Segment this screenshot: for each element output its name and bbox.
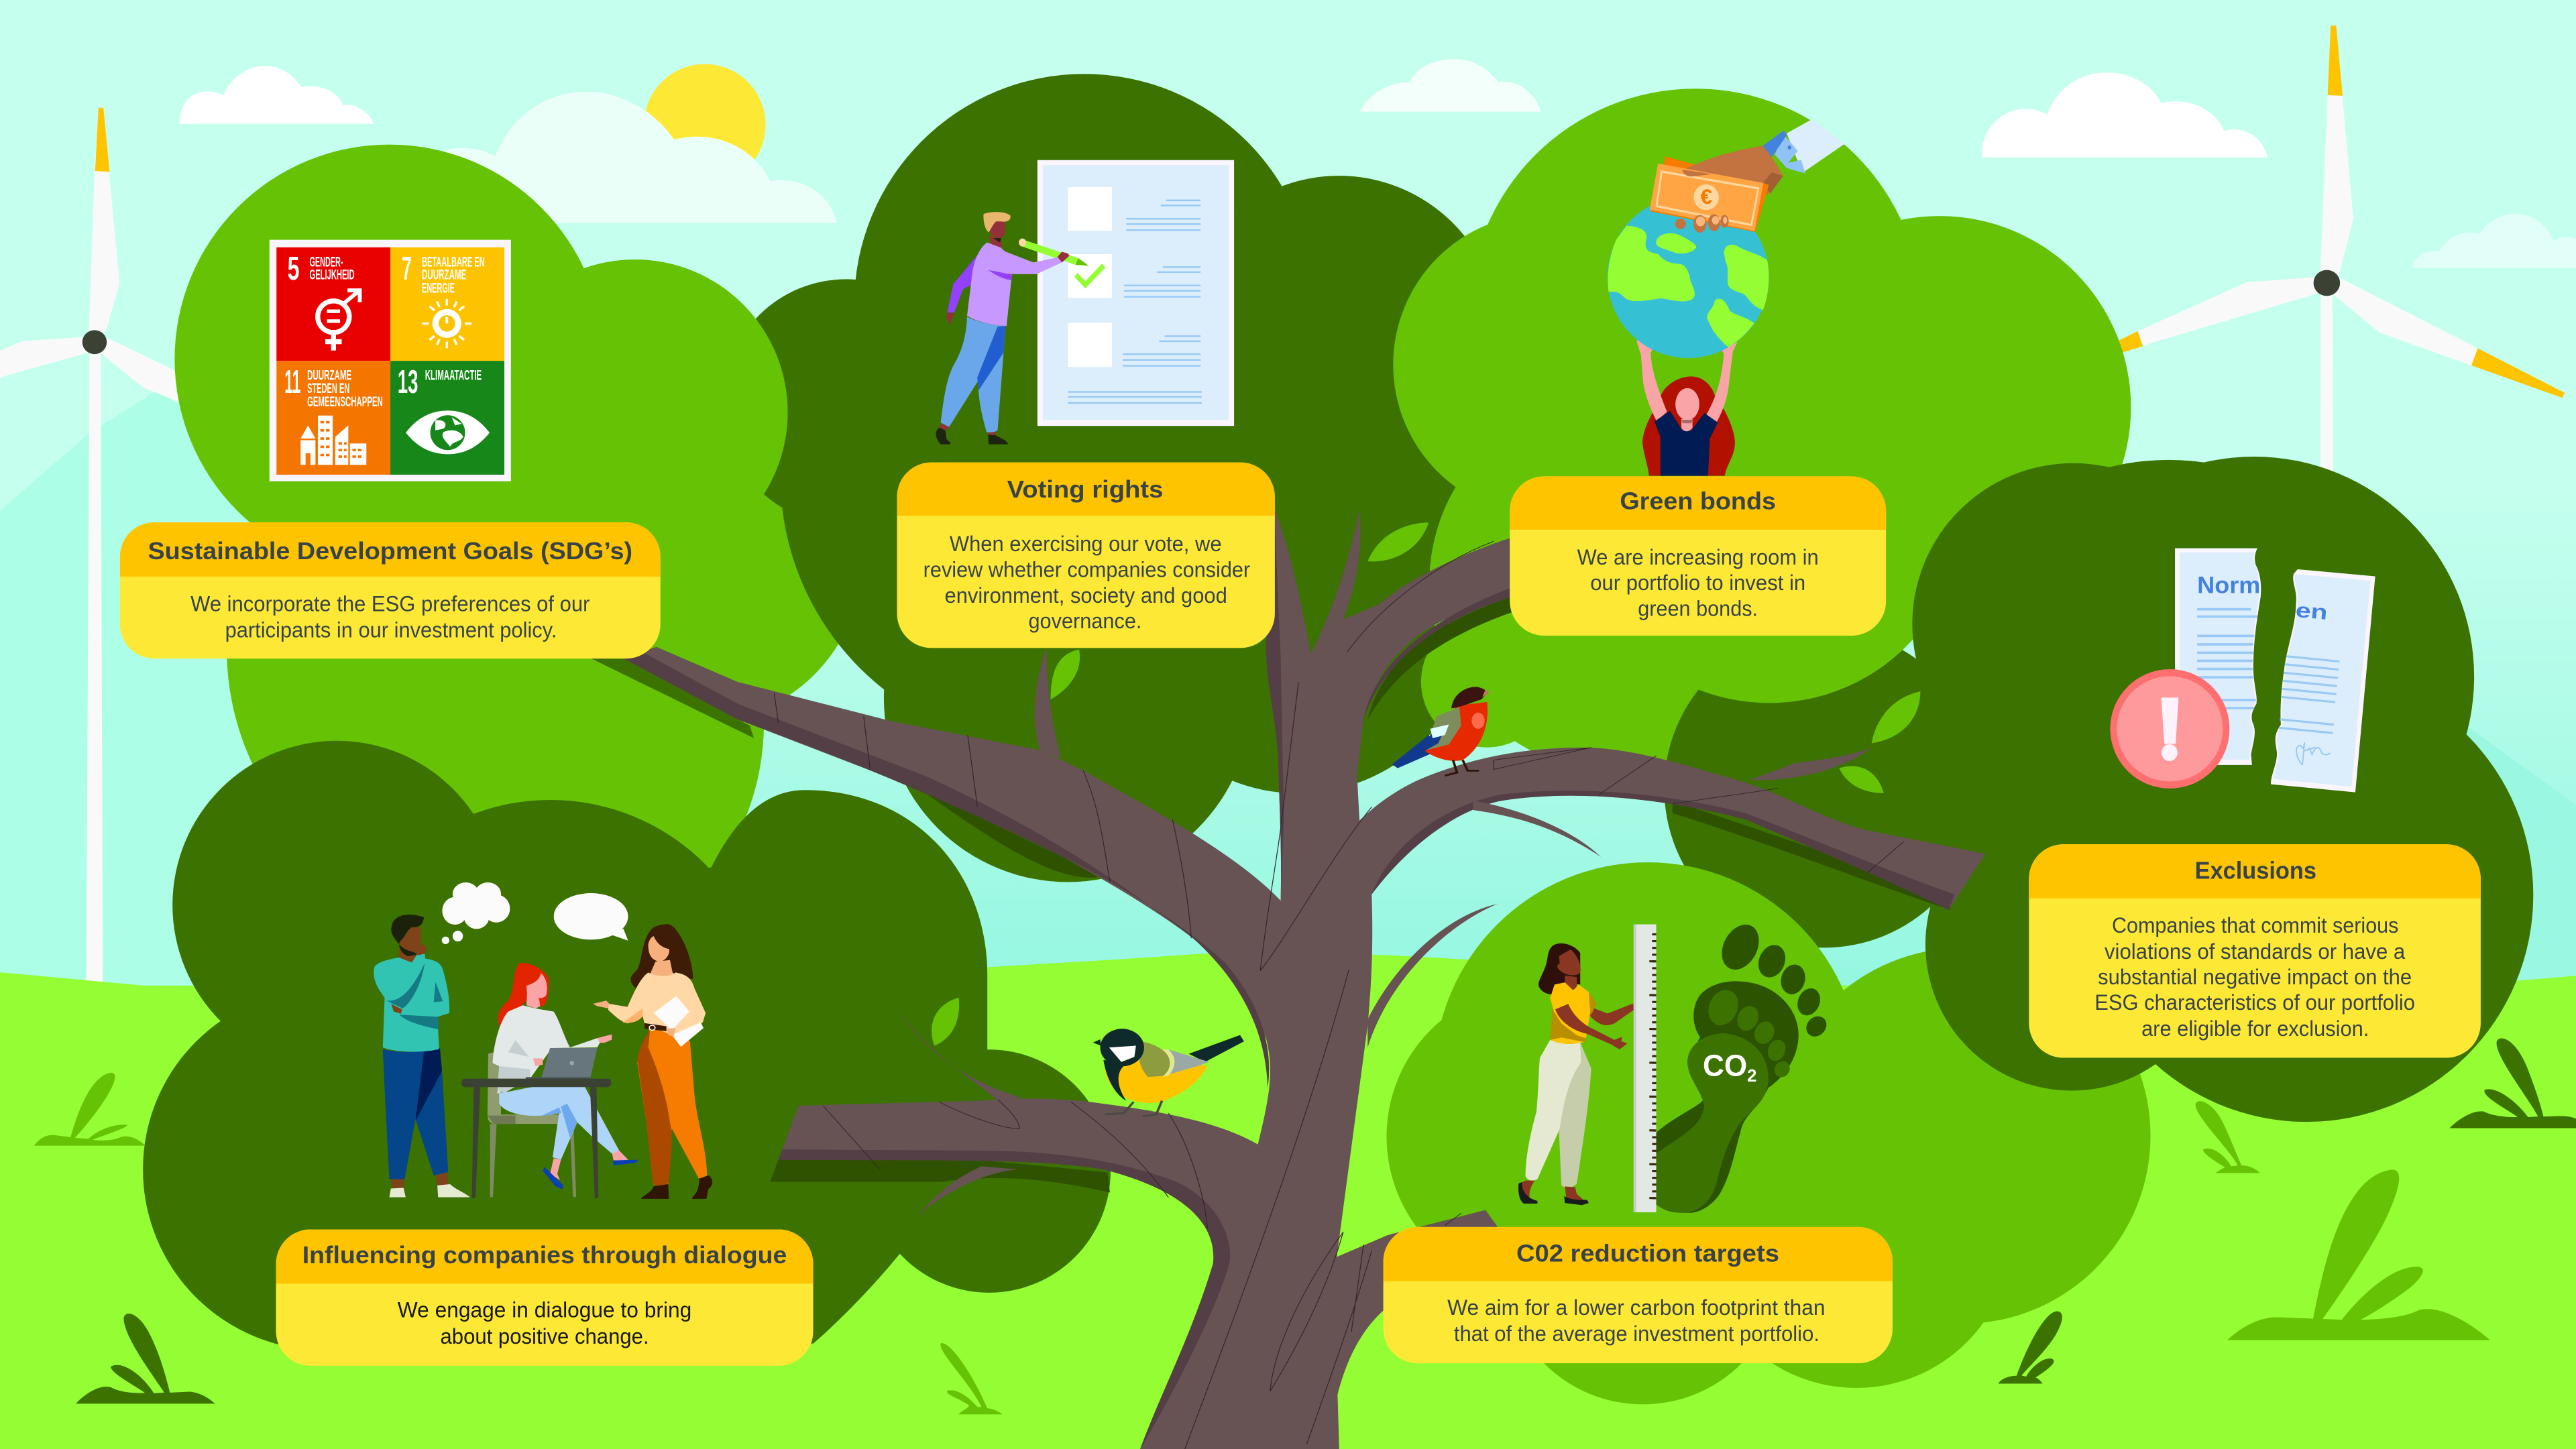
card: Voting rights bbox=[897, 463, 1275, 648]
woman seated with laptop bbox=[488, 963, 638, 1198]
card: CO2 reduction targets: C02 reduction targets bbox=[1516, 1240, 1779, 1267]
right sheet bbox=[2271, 569, 2375, 793]
right sheet paper bbox=[2274, 574, 2370, 787]
ballot sheet bbox=[1038, 160, 1234, 426]
card: Influencing companies through dialogue: We engage in dialogue to bring bbox=[398, 1297, 691, 1322]
card: Influencing companies through dialogue: Influencing companies through dialogue bbox=[302, 1242, 787, 1269]
card: Sustainable Development Goals bbox=[120, 522, 661, 658]
card: Green bonds: our portfolio to invest in bbox=[1590, 570, 1805, 595]
card: Exclusions: Exclusions bbox=[2195, 858, 2316, 884]
right sheet lines and signature bbox=[2279, 656, 2340, 733]
card: CO2 reduction targets: that of the average investment portfolio. bbox=[1454, 1321, 1819, 1346]
footprint bbox=[1657, 920, 1830, 1213]
card: Exclusions: violations of standards or have a bbox=[2105, 939, 2406, 964]
ground bbox=[0, 952, 2576, 1449]
branch shadows on foliage bbox=[590, 595, 1950, 1357]
card: Green bonds: green bonds. bbox=[1638, 596, 1758, 621]
wind turbine left bbox=[0, 108, 184, 982]
illustration: globe, money and person bbox=[1608, 119, 1844, 476]
card: Influencing companies through dialogue bbox=[276, 1230, 814, 1366]
torn doc word right: en bbox=[2295, 599, 2329, 624]
illustration: torn document and alert bbox=[2110, 548, 2375, 793]
foliage: dark voting crown bbox=[723, 74, 1500, 882]
card: Exclusions: ESG characteristics of our portfolio bbox=[2094, 990, 2415, 1015]
SDG tile 7: BETAALBARE EN bbox=[422, 254, 485, 270]
SDG tile 11: STEDEN EN bbox=[307, 381, 349, 396]
foliage: dark dialogue crown bbox=[143, 741, 1111, 1350]
foliage: light bonds crown bbox=[1393, 89, 2131, 703]
CO2 label: 2 bbox=[1747, 1067, 1756, 1086]
wind turbine right bbox=[2119, 25, 2565, 479]
signature bbox=[2296, 742, 2331, 765]
card: Sustainable Development Goals: We incorporate the ESG preferences of our bbox=[190, 591, 590, 616]
man standing bbox=[374, 915, 470, 1198]
SDG tile 11: GEMEENSCHAPPEN bbox=[307, 394, 383, 410]
SDG tile 7: 7 bbox=[402, 251, 412, 287]
card: Exclusions: are eligible for exclusion. bbox=[2141, 1016, 2369, 1041]
torn doc word left: Norm bbox=[2197, 571, 2260, 598]
background hills bbox=[0, 391, 2576, 1002]
illustration: three people in dialogue bbox=[374, 915, 712, 1199]
SDG tile 7 bbox=[390, 247, 504, 361]
clouds bbox=[180, 59, 2576, 268]
card: Green bonds: Green bonds bbox=[1620, 487, 1776, 514]
plants left bbox=[34, 1073, 215, 1403]
foliage: dark exclusions crown bbox=[1912, 457, 2533, 1122]
plants right bbox=[2196, 1038, 2576, 1340]
table bbox=[461, 1079, 611, 1198]
twigs bbox=[898, 510, 1872, 1216]
card: Influencing companies through dialogue: about positive change. bbox=[440, 1324, 649, 1348]
globe bbox=[1608, 196, 1769, 358]
leaves bbox=[932, 522, 1920, 1045]
SDG tile 13: KLIMAATACTIE bbox=[425, 367, 482, 383]
illustration: voting sheet and person bbox=[936, 160, 1234, 445]
SDG tile 7: ENERGIE bbox=[422, 281, 455, 296]
sky background bbox=[0, 0, 2576, 986]
SDG tile 11 bbox=[276, 361, 390, 475]
foliage: light SDG crown, upper lobes bbox=[174, 145, 788, 574]
tree bbox=[590, 507, 1985, 1449]
small plant in front of foliage bbox=[1999, 1312, 2062, 1384]
bird: bullfinch bbox=[1392, 687, 1490, 776]
left sheet bbox=[2175, 548, 2261, 765]
CO2 label: CO bbox=[1703, 1048, 1747, 1082]
alert inner bbox=[2117, 677, 2223, 781]
card: Voting rights: When exercising our vote, we bbox=[950, 531, 1222, 556]
foliage: dark exclusions lower-left lobe bbox=[1664, 629, 1983, 947]
card: CO2 reduction targets: We aim for a lower carbon footprint than bbox=[1447, 1295, 1826, 1320]
SDG tile 5: GENDER- bbox=[310, 254, 343, 270]
card: Voting rights: environment, society and good bbox=[945, 583, 1227, 607]
card: Sustainable Development Goals: Sustainable Development Goals (SDG’s) bbox=[148, 538, 632, 565]
SDG tile 13: 13 bbox=[398, 364, 418, 400]
card: Sustainable Development Goals: participants in our investment policy. bbox=[225, 617, 557, 642]
sun bbox=[644, 64, 766, 186]
bark lines bbox=[774, 541, 1904, 1449]
foliage: light bonds crown, lower left bbox=[1421, 394, 1807, 772]
illustration: ruler, footprint and woman bbox=[1518, 920, 1830, 1213]
left sheet paper bbox=[2180, 553, 2259, 760]
plant centre bottom bbox=[940, 1343, 1003, 1414]
alert mark bbox=[2162, 697, 2178, 761]
card: Green bonds bbox=[1510, 476, 1886, 636]
left sheet lines bbox=[2197, 610, 2257, 708]
person holding globe bbox=[1637, 337, 1738, 476]
speech bubbles bbox=[442, 882, 628, 944]
euro symbol: € bbox=[1700, 184, 1712, 209]
woman measuring bbox=[1518, 943, 1634, 1205]
alert circle bbox=[2110, 669, 2229, 789]
card: Voting rights: review whether companies consider bbox=[923, 557, 1250, 581]
SDG icon grid bbox=[270, 240, 511, 481]
SDG tile 13 bbox=[390, 361, 504, 475]
ruler bbox=[1634, 925, 1657, 1212]
card: Voting rights: governance. bbox=[1028, 608, 1141, 633]
card: Exclusions: Companies that commit serious bbox=[2112, 913, 2398, 937]
SDG tile 7: DUURZAME bbox=[422, 267, 466, 282]
woman standing bbox=[593, 924, 712, 1199]
bark shadow bands bbox=[623, 507, 1954, 1449]
hand with banknote bbox=[1650, 119, 1844, 233]
card: Exclusions bbox=[2029, 844, 2481, 1058]
SDG tile 11: DUURZAME bbox=[307, 367, 351, 383]
trunk and main branches bbox=[623, 507, 1985, 1449]
SDG tile 5: GELIJKHEID bbox=[310, 268, 355, 283]
bird: great tit bbox=[1093, 1029, 1244, 1116]
SDG tile 11: 11 bbox=[284, 364, 300, 400]
card: Exclusions: substantial negative impact on the bbox=[2098, 964, 2412, 989]
foliage: light SDG crown, lower lobes bbox=[227, 378, 862, 978]
card: Voting rights: Voting rights bbox=[1007, 476, 1163, 503]
card: CO2 reduction targets bbox=[1384, 1227, 1893, 1363]
SDG tile 5: 5 bbox=[288, 251, 300, 287]
SDG tile 5 bbox=[276, 247, 390, 361]
voting person bbox=[936, 212, 1089, 445]
card: Green bonds: We are increasing room in bbox=[1577, 544, 1819, 569]
foliage: light CO2 crown bbox=[1386, 862, 2151, 1404]
